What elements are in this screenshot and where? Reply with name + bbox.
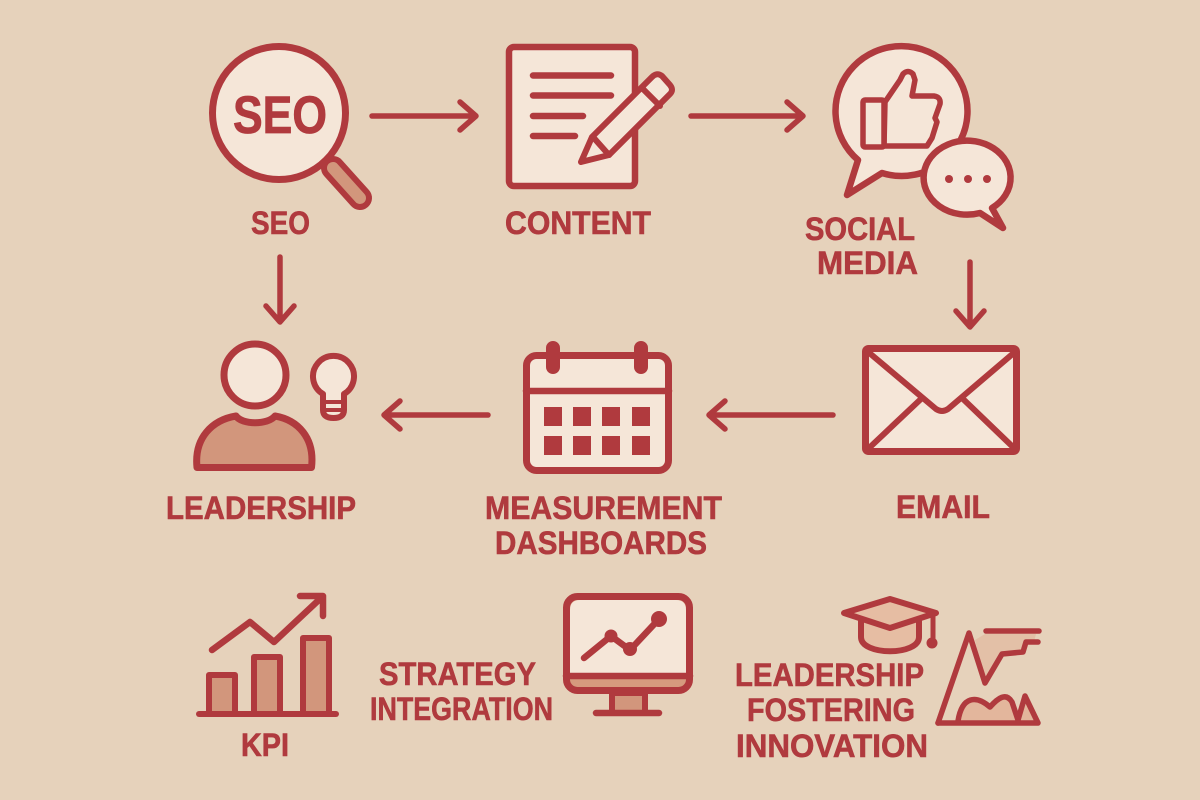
icon: content document and pencil — [509, 47, 672, 186]
heading: social media — [805, 211, 918, 281]
heading: social media: SOCIAL — [805, 211, 915, 247]
arrow: email to dashboards — [709, 401, 833, 429]
heading: email: EMAIL — [896, 489, 990, 525]
arrow: social media to email — [956, 262, 984, 327]
arrow: content to social media — [691, 102, 803, 130]
heading: leadership fostering innovation: LEADERSHIP — [735, 657, 924, 693]
icon: innovation mountains — [938, 631, 1039, 723]
icon: graduation cap — [844, 599, 938, 651]
arrow: dashboards to leadership — [384, 401, 488, 429]
icon: measurement calendar — [526, 348, 669, 470]
heading: KPI: KPI — [241, 727, 289, 763]
heading: content: CONTENT — [505, 205, 651, 241]
heading: leadership fostering innovation — [735, 657, 928, 764]
heading: strategy integration — [370, 656, 553, 727]
icon: social media bubbles — [836, 46, 1011, 228]
heading: leadership: LEADERSHIP — [166, 490, 356, 526]
heading: leadership fostering innovation: FOSTERING — [747, 692, 915, 728]
arrow: SEO to content — [372, 102, 476, 130]
heading: measurement dashboards: MEASUREMENT — [485, 490, 722, 526]
icon: SEO magnifying glass — [212, 46, 360, 198]
heading: strategy integration: STRATEGY — [379, 656, 536, 692]
icon: KPI bar chart — [199, 596, 336, 714]
icon: leadership person and bulb — [197, 344, 354, 468]
icon: strategy monitor — [566, 596, 690, 713]
icon: SEO magnifying glass: SEO — [233, 86, 327, 145]
arrow: SEO to leadership — [266, 257, 294, 322]
heading: leadership fostering innovation: INNOVATION — [736, 728, 928, 764]
heading: measurement dashboards — [485, 490, 722, 561]
heading: measurement dashboards: DASHBOARDS — [495, 525, 707, 561]
icon: email envelope — [866, 348, 1016, 452]
heading: SEO: SEO — [251, 205, 310, 241]
heading: strategy integration: INTEGRATION — [370, 691, 553, 727]
heading: social media: MEDIA — [817, 245, 918, 281]
